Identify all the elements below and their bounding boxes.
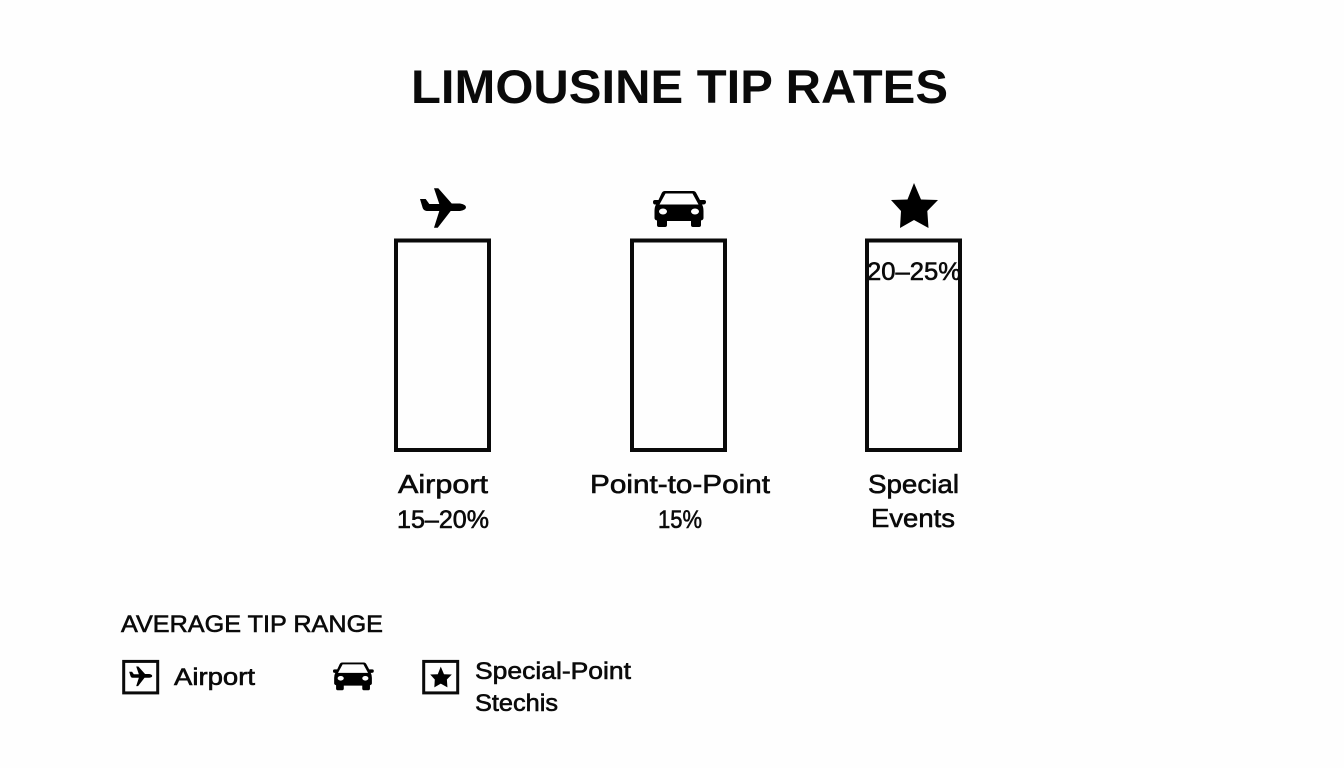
column: special events <box>867 183 961 533</box>
legend icon: airplane box <box>124 661 158 693</box>
label: special events: Special <box>868 469 959 499</box>
column: point-to-point <box>590 191 771 534</box>
bar: point-to-point <box>632 240 725 450</box>
label: point-to-point: Point-to-Point <box>590 469 771 499</box>
legend icon: car <box>333 662 374 690</box>
title: LIMOUSINE TIP RATES <box>411 60 948 113</box>
label: special events line two: Events <box>871 503 955 533</box>
chart: tip rate columns <box>396 183 961 534</box>
legend icon: star box <box>424 661 458 693</box>
value: special events: 20–25% <box>867 258 961 286</box>
legend heading: AVERAGE TIP RANGE <box>121 611 383 638</box>
legend item: airport <box>124 661 255 693</box>
legend item: special-point <box>424 658 631 717</box>
value: point-to-point: 15% <box>658 506 702 534</box>
value: airport: 15–20% <box>397 506 489 534</box>
icon: airplane <box>420 188 466 228</box>
legend label: airport: Airport <box>174 664 255 691</box>
column: airport <box>396 188 489 534</box>
bar: special events <box>867 240 960 450</box>
legend label: stechis: Stechis <box>475 690 558 717</box>
icon: star <box>891 183 938 228</box>
icon: car <box>653 191 706 227</box>
legend <box>121 611 631 717</box>
legend label: special-point: Special-Point <box>475 658 631 685</box>
bar: airport <box>396 240 489 450</box>
label: airport: Airport <box>398 469 489 499</box>
